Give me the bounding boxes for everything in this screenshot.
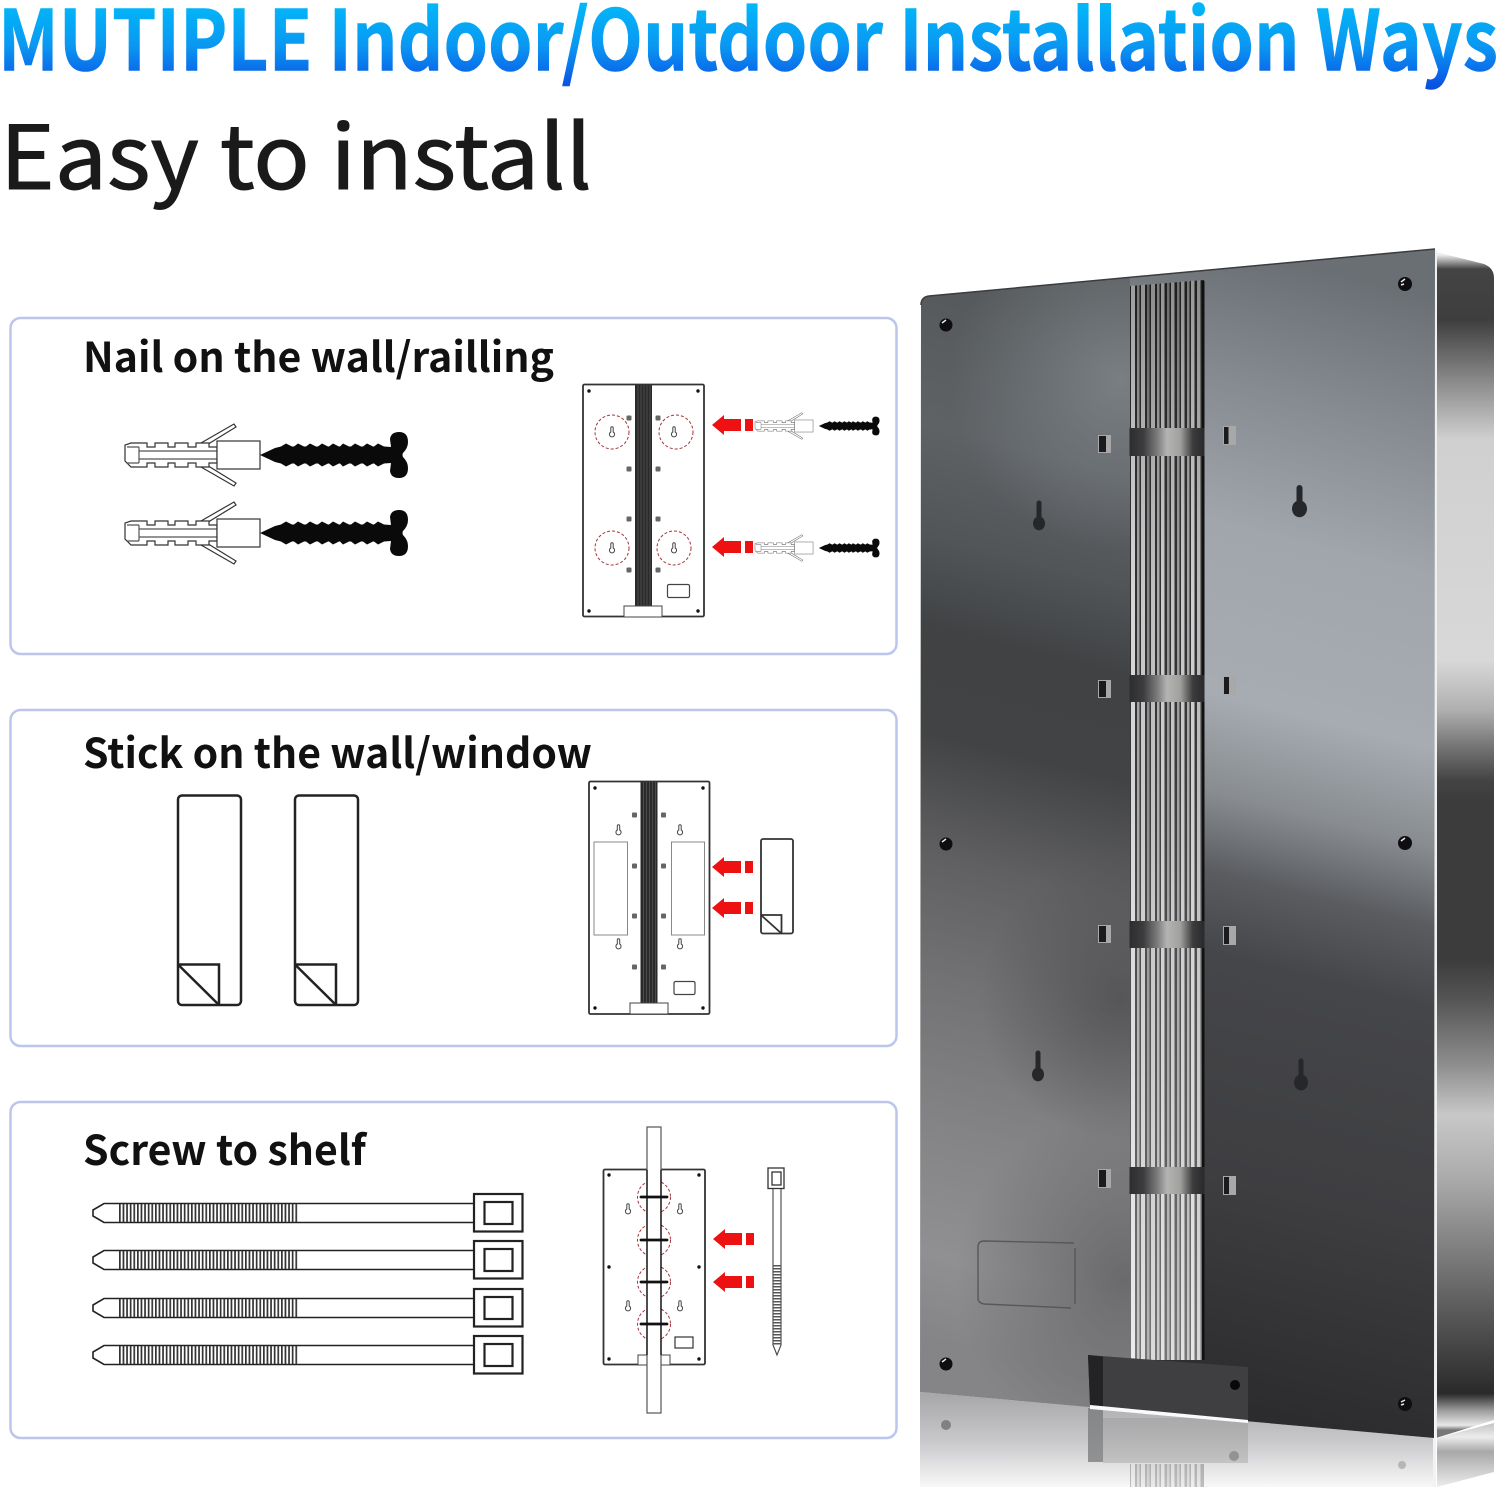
diagram: device back with keyholes — [583, 384, 704, 617]
floor reflection — [920, 1392, 1494, 1487]
icon: cable tie 1 — [93, 1194, 522, 1232]
label area outline — [978, 1241, 1075, 1308]
device edge highlight — [1434, 250, 1437, 1438]
icon: single cable tie — [768, 1168, 784, 1355]
heading: stick: Stick on the wall/window — [83, 720, 592, 780]
keyholes — [1032, 485, 1308, 1090]
mounting slots — [1098, 426, 1236, 1195]
icon: adhesive strip right — [295, 796, 358, 1005]
heading: nail: Nail on the wall/railling — [83, 324, 554, 384]
panel: nail on the wall/railing — [10, 318, 896, 654]
arrow: bottom, screw — [713, 1272, 754, 1292]
device front face — [915, 245, 1440, 1445]
icon: cable tie 3 — [93, 1289, 522, 1326]
arrow: top, nail — [712, 415, 753, 435]
bottom plate — [1088, 1355, 1248, 1423]
icon: single adhesive strip — [761, 839, 793, 934]
heading: screw: Screw to shelf — [83, 1117, 368, 1177]
panel: screw to shelf — [10, 1102, 896, 1438]
arrow: bottom, nail — [712, 537, 753, 557]
icon: cable tie 2 — [93, 1241, 522, 1278]
arrow: bottom, stick — [712, 898, 753, 918]
diagram: device back with adhesive strips — [589, 782, 710, 1014]
panel: stick on the wall/window — [10, 710, 896, 1046]
arrow: top, stick — [712, 857, 753, 877]
icon: anchor and screw, bottom small — [755, 535, 880, 561]
device side — [1436, 252, 1494, 1438]
vent bands — [1130, 428, 1204, 1194]
arrow: top, screw — [713, 1229, 754, 1249]
product photo: device back — [915, 245, 1494, 1487]
screws — [940, 277, 1412, 1411]
vent strip — [1130, 280, 1204, 1360]
subtitle: Easy to install — [0, 88, 592, 215]
icon: adhesive strip left — [178, 796, 241, 1005]
diagram: device on pole with ties — [604, 1127, 705, 1413]
icon: anchors and screws, large — [125, 424, 408, 564]
icon: anchor and screw, top small — [755, 413, 880, 439]
icon: cable tie 4 — [93, 1336, 522, 1374]
